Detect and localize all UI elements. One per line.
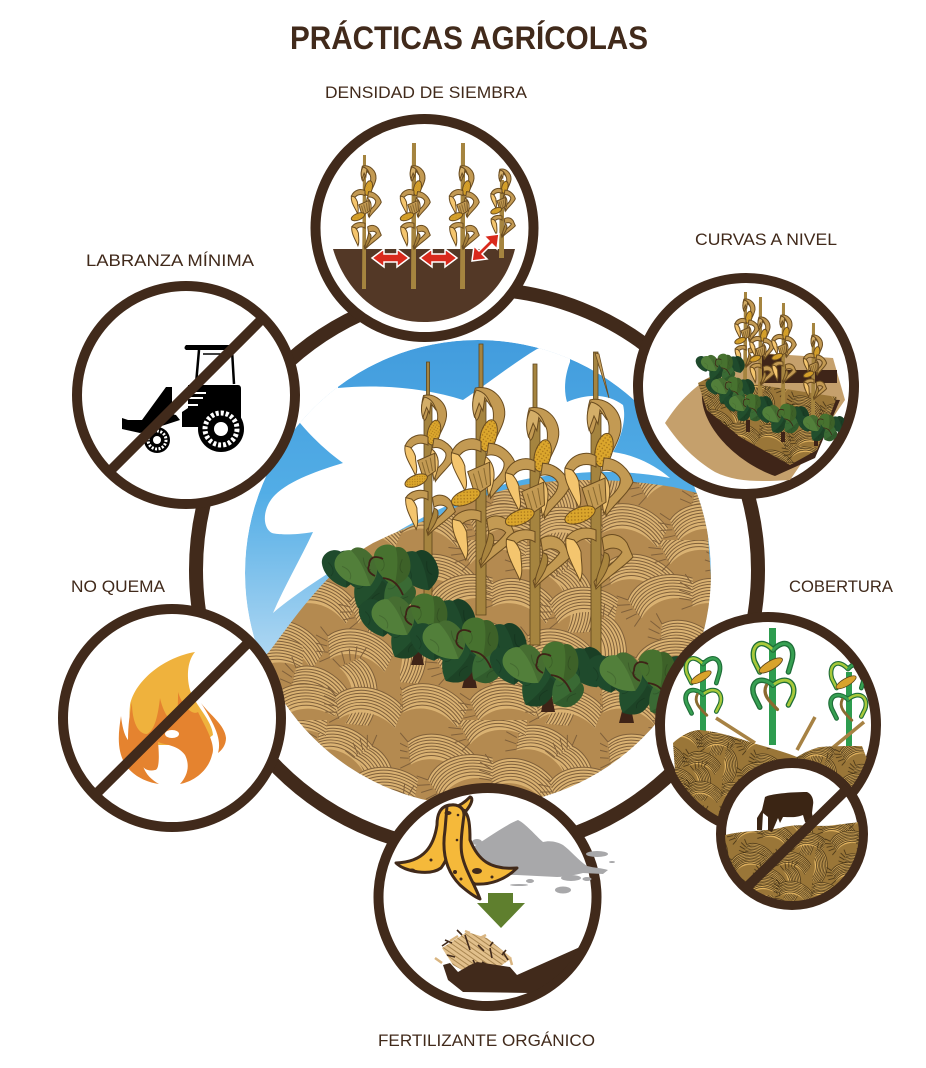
dry stalks (716, 717, 864, 750)
tan terrain (665, 353, 845, 481)
label: NO QUEMA (71, 577, 166, 596)
maize plant 4 (562, 352, 633, 655)
panel: no grazing on cover (721, 763, 863, 905)
ground covered with straw (266, 480, 711, 800)
icon: grazing cow (757, 792, 814, 832)
label: DENSIDAD DE SIEMBRA (325, 83, 528, 102)
legume row with trunks (322, 542, 707, 723)
icon: flame (119, 652, 226, 784)
dark terrain bands (762, 354, 837, 383)
maize plant 2 (449, 344, 516, 615)
central illustration: field with mulch, maize and legumes (240, 335, 720, 820)
panel: fertilizante orgánico (378, 788, 615, 1050)
panel: densidad de siembra (316, 83, 534, 337)
green arrow (477, 893, 525, 928)
ash heap (468, 820, 615, 894)
label: CURVAS A NIVEL (695, 230, 837, 249)
label: FERTILIZANTE ORGÁNICO (378, 1031, 595, 1050)
panel: labranza mínima (77, 251, 295, 504)
panel: no quema (63, 577, 281, 827)
legume row (696, 353, 848, 446)
soil (333, 249, 515, 322)
panel: curvas a nivel (638, 230, 854, 494)
straw terrace (698, 377, 837, 465)
hand (443, 948, 578, 993)
maize plant 1 (403, 362, 455, 600)
icon: banana peel (396, 797, 517, 899)
prohibition slash (745, 788, 848, 889)
title: PRÁCTICAS AGRÍCOLAS (290, 20, 648, 56)
prohibition slash (109, 318, 263, 472)
prohibition slash (95, 641, 250, 795)
straw mulch (673, 730, 866, 816)
spacing arrows (372, 234, 499, 267)
label: COBERTURA (789, 577, 894, 596)
icon: tractor (122, 345, 244, 453)
maize plant 3 (503, 364, 570, 645)
maize (734, 292, 827, 420)
connecting ring (196, 289, 758, 851)
maize stems and plants (350, 143, 515, 289)
straw (725, 822, 860, 905)
panel: cobertura (660, 577, 894, 840)
green maize (686, 628, 866, 750)
label: LABRANZA MÍNIMA (86, 251, 255, 270)
sky and clouds (245, 335, 711, 806)
compost pile (434, 929, 514, 970)
